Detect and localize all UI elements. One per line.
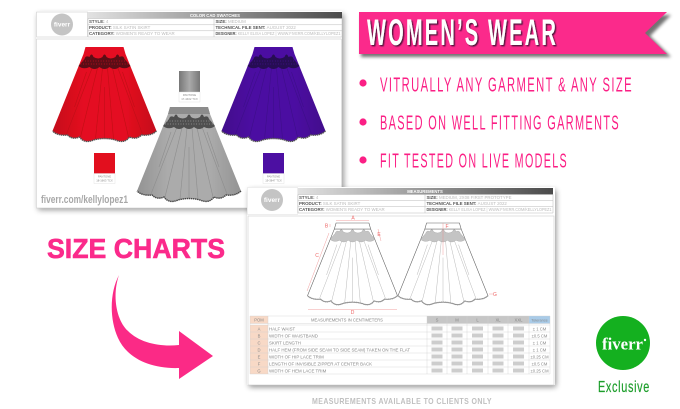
measurement table: S — [436, 318, 439, 322]
flat sketch: front: D — [351, 310, 355, 316]
swatch: red: 18-1663 TCX — [96, 178, 113, 182]
header: color CAD swatches: COLOR CAD SWATCHES — [190, 13, 240, 18]
swatch: purple: PANTONE — [267, 174, 280, 178]
swatch: gray: 17-4402 TCX — [181, 97, 198, 101]
header: color CAD swatches: TECHNICAL FILE SENT: AUGUST 2022 — [216, 25, 296, 30]
measurement table: XXL — [515, 318, 523, 322]
bullet list — [359, 74, 633, 172]
header: measurements: STYLE: 4 — [299, 195, 319, 200]
measurement table: MEASUREMENTS IN CENTIMETERS — [311, 318, 383, 322]
measurement table: POM — [254, 318, 264, 322]
panel: measurements — [247, 187, 556, 387]
header: measurements: PRODUCT: SILK SATIN SKIRT — [299, 201, 361, 206]
measurement table: B — [258, 333, 261, 338]
header: measurements: fiverr — [264, 197, 281, 204]
header: color CAD swatches: SIZE: MEDIUM — [216, 19, 246, 24]
badge: fiverr exclusive: Exclusive — [598, 379, 650, 396]
purple skirt — [222, 47, 326, 141]
swatch: gray: PANTONE — [183, 93, 196, 97]
measurement table: C — [257, 340, 261, 345]
measurement table: D — [257, 347, 261, 352]
measurement table: WIDTH OF HEM LACE TRIM — [269, 368, 327, 373]
measurement table: HALF WAIST — [269, 326, 296, 331]
measurement table: ± 1 CM — [533, 326, 547, 331]
banner: women's wear — [359, 12, 671, 57]
measurement table: ±0.25 CM — [530, 354, 549, 359]
header: measurements: SIZE: MEDIUM, 2X08 FIRST PROTOTYPE — [426, 195, 512, 200]
measurement labels — [307, 220, 397, 310]
measurement table: ±0.5 CM — [532, 361, 548, 366]
swatch: purple — [263, 153, 284, 184]
arrow: curved pink — [112, 275, 213, 379]
flat sketch: front — [307, 216, 397, 316]
measurement table: HALF HEM (FROM SIDE SEAM TO SIDE SEAM) TAKEN ON THE FLAT — [269, 347, 410, 352]
measurement table: M — [455, 318, 459, 322]
measurement table: ±0.25 CM — [530, 368, 549, 373]
measurement table: WIDTH OF HIP LACE TRIM — [269, 354, 324, 359]
watermark: fiverr.com/kellylopez1 — [41, 194, 128, 206]
measurement table: L — [476, 318, 479, 322]
header: color CAD swatches: PRODUCT: SILK SATIN SKIRT — [89, 25, 151, 30]
measurement table: Tolerance — [531, 318, 548, 322]
measurement table: ± 1 CM — [533, 347, 547, 352]
flat sketch: back: F — [445, 224, 449, 230]
header: color CAD swatches: STYLE: 4 — [89, 19, 109, 24]
header: measurements: MEASUREMENTS — [407, 189, 443, 194]
panel: color CAD swatches — [36, 11, 344, 210]
header: measurements — [248, 188, 553, 214]
measurement table — [250, 316, 550, 374]
footnote: MEASUREMENTS AVAILABLE TO CLIENTS ONLY — [312, 396, 492, 406]
measurement table: LENGTH OF INVISIBLE ZIPPER AT CENTER BACK — [269, 361, 372, 366]
flat sketch: front: A — [351, 216, 355, 222]
badge: fiverr exclusive — [596, 316, 650, 396]
flat sketch: front: C — [315, 253, 319, 259]
measurement table: E — [258, 354, 261, 359]
flat sketch: front: E — [377, 232, 381, 238]
heading: size charts: SIZE CHARTS — [47, 233, 225, 264]
measurement table: ±0.5 CM — [532, 333, 548, 338]
header: measurements: TECHNICAL FILE SENT: AUGUST 2022 — [426, 201, 507, 206]
header: color CAD swatches — [36, 12, 342, 37]
header: measurements: CATEGORY: WOMEN'S READY TO WEAR — [299, 207, 385, 212]
measurement table: XL — [495, 318, 501, 322]
gray skirt — [137, 107, 241, 201]
swatch: red — [94, 153, 115, 184]
header: color CAD swatches: CATEGORY: WOMEN'S READY TO WEAR — [89, 31, 175, 36]
flat sketch: front: B — [325, 224, 329, 230]
measurement table: WIDTH OF WAISTBAND — [269, 333, 318, 338]
header: color CAD swatches: DESIGNER: KELLY ELISA LOPEZ | WWW.FIVERR.COM/KELLYLOPEZ1 — [216, 31, 341, 36]
measurement table: F — [258, 361, 261, 366]
swatch: gray — [179, 71, 200, 102]
flat sketch: back: G — [493, 292, 497, 298]
measurement table: SKIRT LENGTH — [269, 340, 301, 345]
swatch: red: PANTONE — [98, 174, 111, 178]
swatch: purple: 19-3847 TCX — [265, 178, 282, 182]
measurement table: A — [258, 326, 261, 331]
measurement table: ± 1 CM — [533, 340, 547, 345]
red skirt — [52, 47, 156, 141]
header: color CAD swatches: fiverr — [54, 22, 71, 28]
flat sketch: back — [398, 223, 497, 305]
header: measurements: DESIGNER: KELLY ELISA LOPEZ | WWW.FIVERR.COM/KELLYLOPEZ1 — [426, 207, 552, 212]
badge: fiverr exclusive: fiverr — [602, 334, 643, 354]
measurement table: G — [257, 368, 261, 373]
